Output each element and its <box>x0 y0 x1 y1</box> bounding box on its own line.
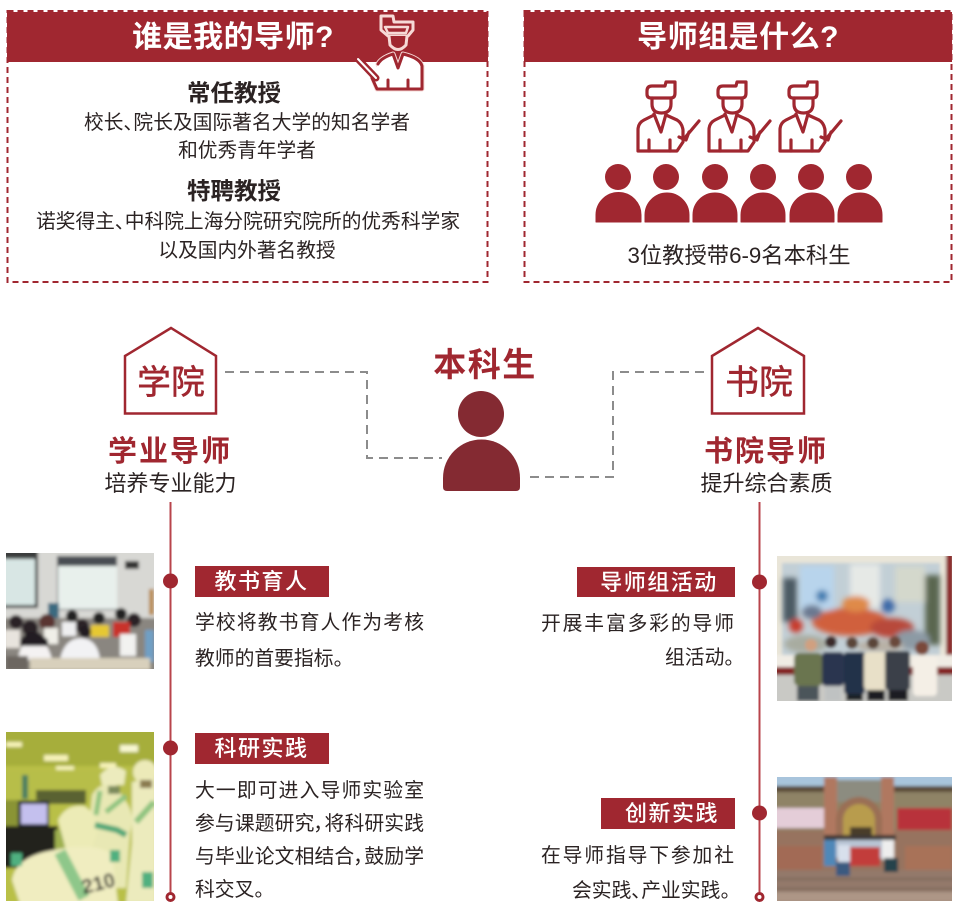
photo: group on building steps <box>777 777 952 901</box>
photo: group in front of painting <box>777 556 952 701</box>
icon: teacher with pointer <box>357 16 422 89</box>
tag: teaching: 教书育人 <box>214 569 309 594</box>
text: permanent professor: 常任教授 <box>187 80 281 106</box>
heading: what is a mentor group: 导师组是什么? <box>637 21 839 54</box>
text: research description: 大一即可进入导师实验室 <box>195 780 424 802</box>
icon: college house: 学院 <box>137 364 205 402</box>
text: distinguished professor: 以及国内外著名教授 <box>158 240 336 262</box>
connector: college to student <box>225 372 442 458</box>
text: teaching description <box>195 612 424 670</box>
panel: what is a mentor group <box>524 11 952 282</box>
icon: residential college house <box>712 328 804 414</box>
tag: research practice <box>195 733 329 764</box>
text: permanent professor: 和优秀青年学者 <box>178 140 316 162</box>
text: research description <box>195 780 424 901</box>
heading: academic mentor: 培养专业能力 <box>104 471 237 496</box>
text: research description: 与毕业论文相结合，鼓励学 <box>195 846 424 868</box>
photo: cleanroom lab: 210 <box>80 869 117 899</box>
icon: residential college house: 书院 <box>725 364 793 402</box>
heading: who is my mentor: 谁是我的导师? <box>132 21 334 54</box>
heading: undergraduate: 本科生 <box>433 346 537 383</box>
tag: innovation practice: 创新实践 <box>625 801 719 826</box>
text: innovation description <box>541 845 734 902</box>
photo: lecture hall <box>6 553 154 669</box>
tag: research practice: 科研实践 <box>214 736 309 761</box>
text: innovation description: 在导师指导下参加社 <box>541 845 734 867</box>
text: teaching description: 学校将教书育人作为考核 <box>195 612 424 634</box>
connector: student to residential college <box>530 372 706 477</box>
tag: mentor group activities <box>577 567 735 597</box>
heading: residential mentor: 书院导师 <box>704 435 828 468</box>
heading: residential mentor: 提升综合素质 <box>700 471 833 496</box>
heading bar: who is my mentor <box>7 12 488 62</box>
text: research description: 科交叉。 <box>195 879 264 901</box>
caption: group ratio: 3位教授带6-9名本科生 <box>627 243 851 268</box>
panel: who is my mentor <box>7 11 488 282</box>
text: permanent professor <box>84 80 410 162</box>
text: distinguished professor: 特聘教授 <box>187 178 281 204</box>
text: innovation description: 会实践、产业实践。 <box>572 880 730 902</box>
heading bar: what is a mentor group <box>524 12 952 62</box>
icons: six students <box>596 164 882 222</box>
text: activities description: 组活动。 <box>665 647 734 669</box>
tag: mentor group activities: 导师组活动 <box>600 570 718 595</box>
text: permanent professor: 校长、院长及国际著名大学的知名学者 <box>84 112 410 134</box>
text: research description: 参与课题研究，将科研实践 <box>195 813 424 835</box>
tag: innovation practice <box>601 798 735 829</box>
icon: student <box>443 391 520 491</box>
heading: residential mentor <box>700 435 833 496</box>
text: distinguished professor: 诺奖得主、中科院上海分院研究院所的优秀科学家 <box>36 211 460 233</box>
heading: academic mentor <box>104 435 237 496</box>
timeline: right <box>752 502 767 900</box>
icon: college house <box>125 328 216 414</box>
text: activities description: 开展丰富多彩的导师 <box>541 613 734 635</box>
photo: cleanroom lab <box>6 732 154 901</box>
text: activities description <box>541 613 734 669</box>
timeline: left <box>163 502 178 900</box>
heading: academic mentor: 学业导师 <box>108 435 232 468</box>
tag: teaching <box>195 566 329 597</box>
text: teaching description: 教师的首要指标。 <box>195 648 343 670</box>
icons: three teachers <box>638 82 841 151</box>
text: distinguished professor <box>36 178 460 262</box>
